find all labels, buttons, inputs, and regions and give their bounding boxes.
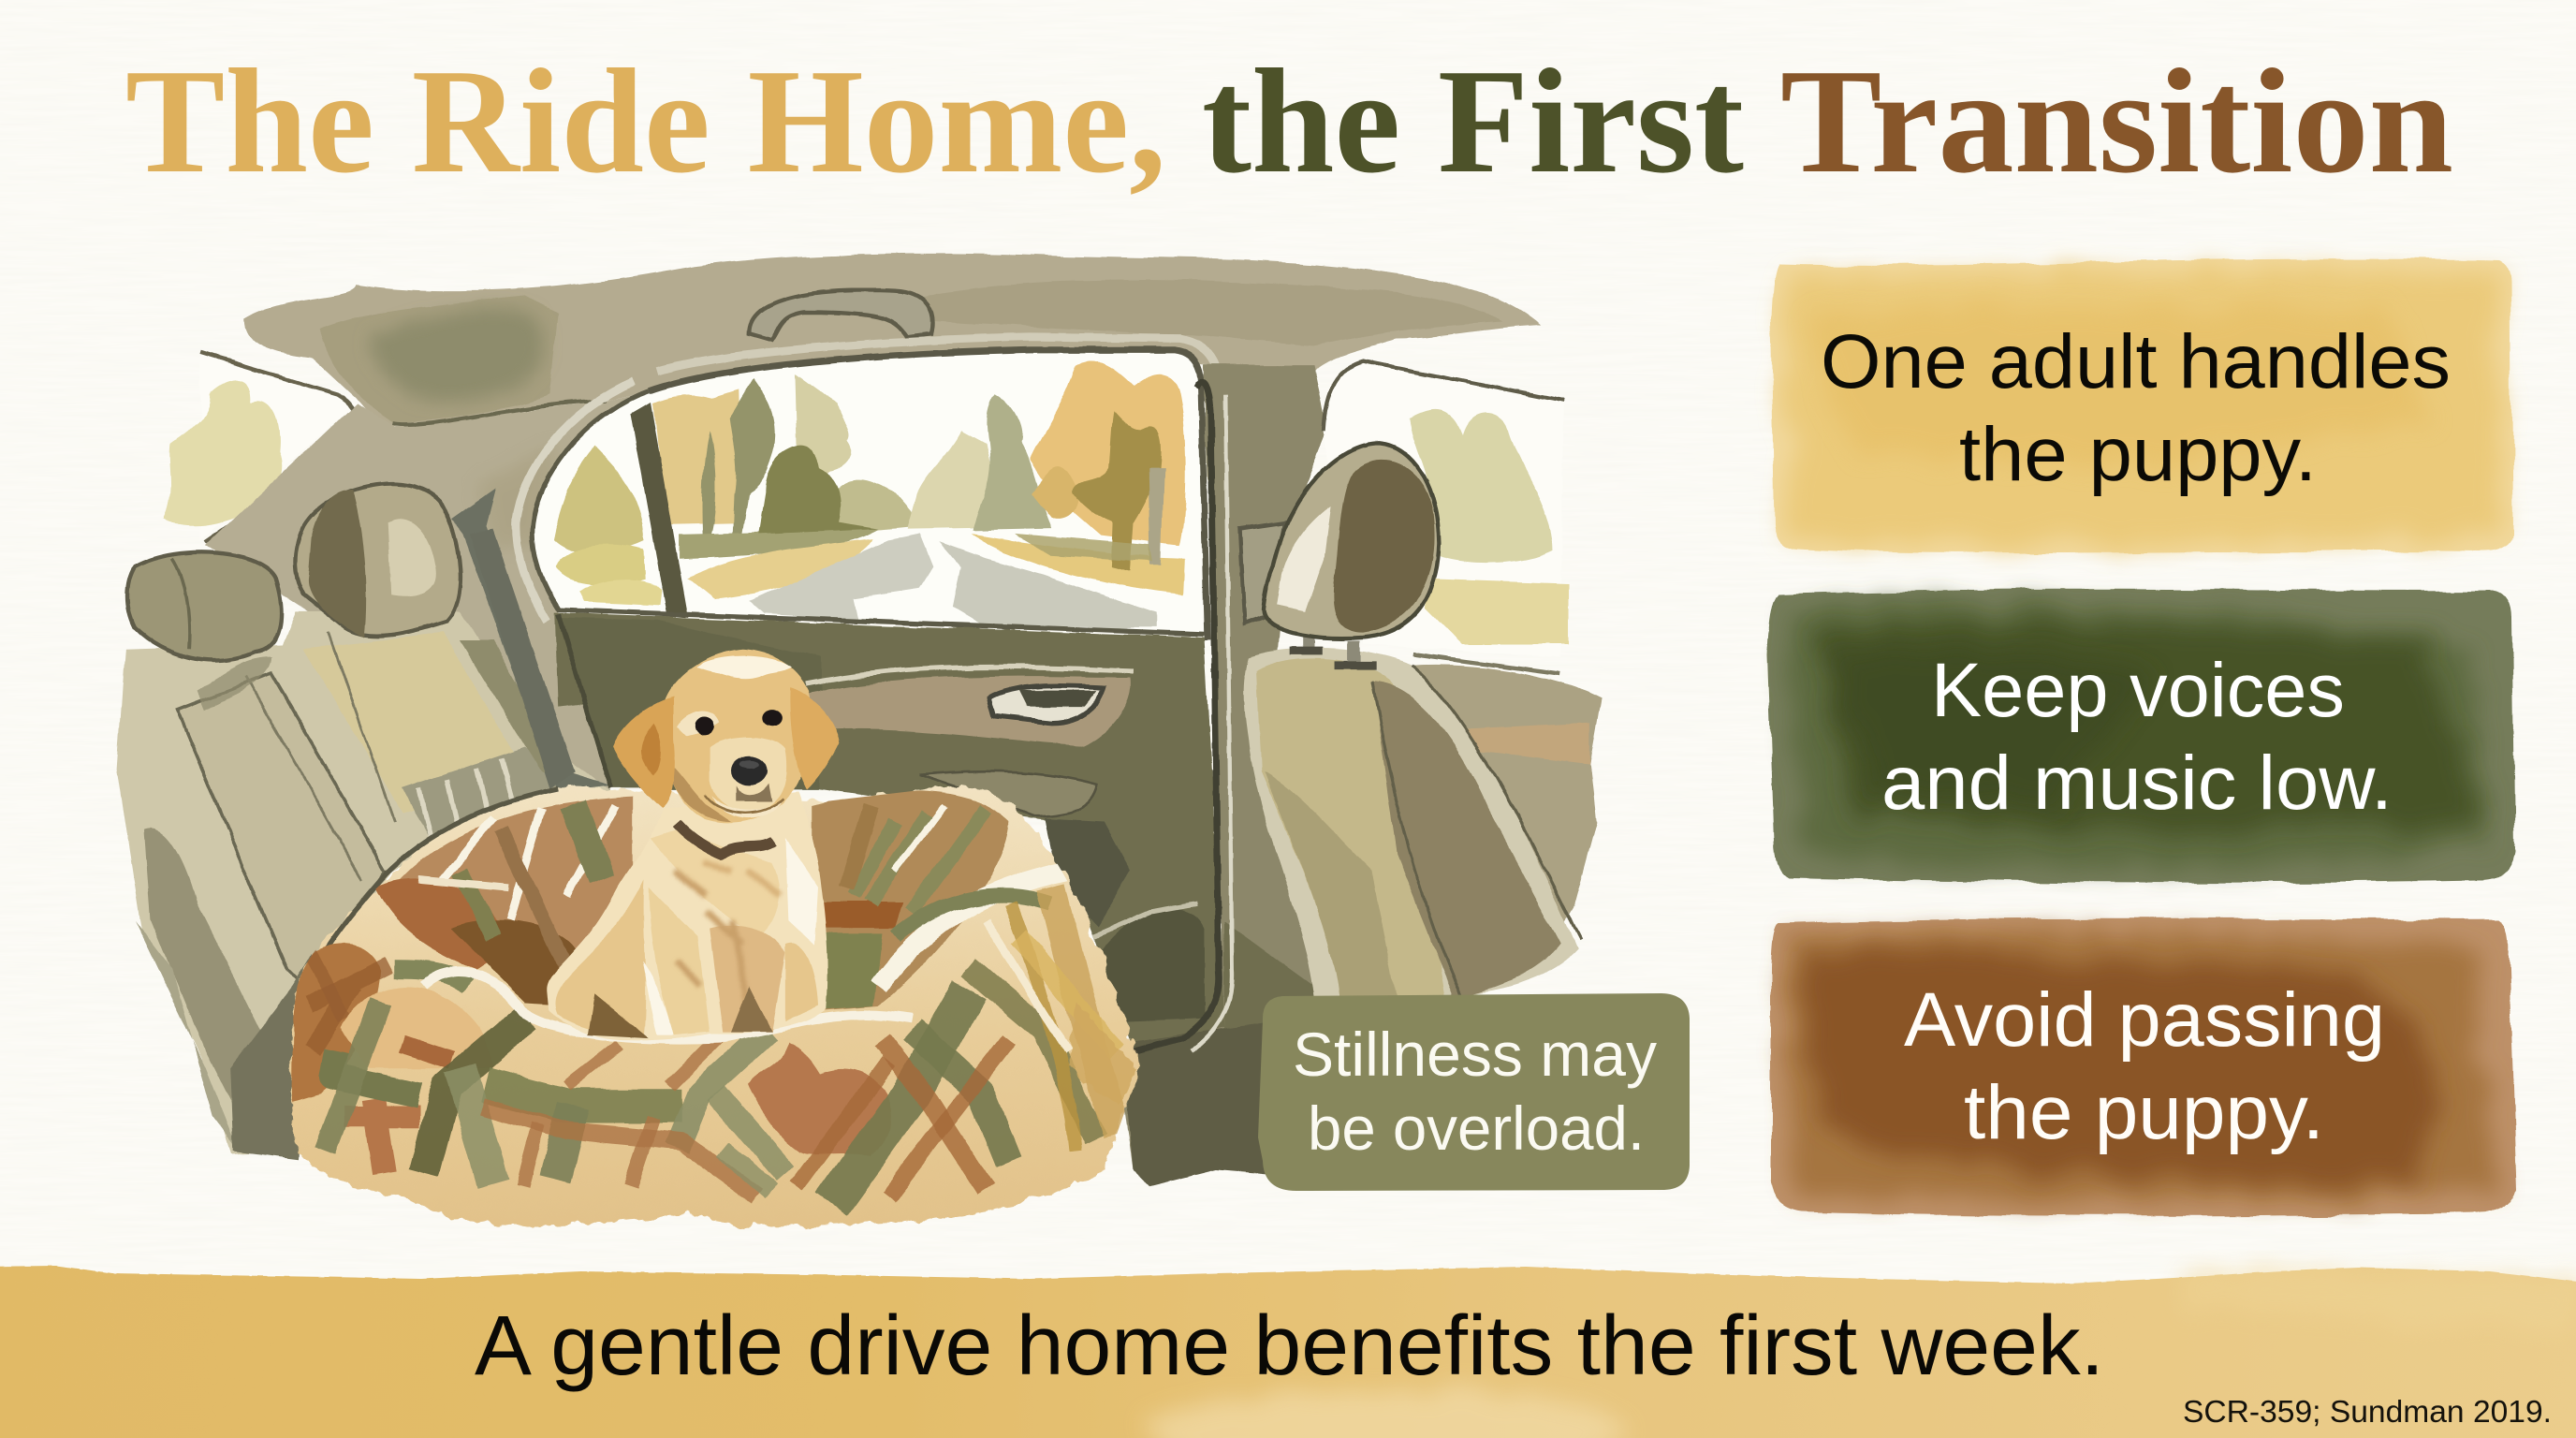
title <box>125 37 2453 204</box>
right window, trees and door <box>1325 361 1602 969</box>
left headrest <box>127 552 282 661</box>
grab handle <box>749 290 932 340</box>
puppy <box>547 649 840 1040</box>
front olive bands <box>424 1017 527 1173</box>
B pillar <box>1117 365 1364 1186</box>
bed inner back right <box>813 791 1010 1010</box>
card: keep voices and music low <box>1767 589 2515 883</box>
headliner <box>243 254 1541 427</box>
front diagonals <box>831 990 969 1204</box>
puppy eyes and nose <box>695 717 714 735</box>
right side stripes <box>969 968 1096 1138</box>
front headrest <box>1264 444 1439 666</box>
title: the First <box>1202 37 1744 204</box>
left side patches <box>292 944 381 1101</box>
card: avoid passing the puppy: the puppy. <box>1964 1070 2324 1155</box>
plaid pattern strokes <box>292 791 1117 1204</box>
C pillar <box>205 391 649 805</box>
left rear window and tree <box>165 353 357 542</box>
card: keep voices and music low: and music low. <box>1881 741 2393 826</box>
card: one adult handles the puppy <box>1771 259 2512 553</box>
title: The Ride Home, <box>125 37 1166 204</box>
title: Transition <box>1780 37 2453 204</box>
footer band <box>0 1266 2576 1438</box>
callout: stillness may be overload: Stillness may <box>1293 1020 1657 1089</box>
card: one adult handles the puppy: the puppy. <box>1959 412 2317 497</box>
puppy head <box>660 649 812 823</box>
main window with scenery <box>533 350 1204 634</box>
card: one adult handles the puppy: One adult handles <box>1821 319 2451 404</box>
puppy collar <box>677 823 774 855</box>
door panel <box>555 613 1236 1060</box>
citation: SCR-359; Sundman 2019. <box>2183 1394 2552 1429</box>
callout: stillness may be overload <box>1258 993 1690 1191</box>
puppy ears <box>613 697 675 808</box>
bed inner back left <box>400 796 633 948</box>
footer band: A gentle drive home benefits the first week. <box>475 1299 2104 1393</box>
card: avoid passing the puppy <box>1771 919 2516 1216</box>
puppy body <box>547 792 827 1040</box>
illustration: puppy in car back seat <box>117 254 1602 1225</box>
callout: stillness may be overload: be overload. <box>1308 1093 1645 1163</box>
seat belt <box>452 488 611 792</box>
middle headrest <box>295 484 461 638</box>
front seat <box>1244 648 1580 997</box>
door edge lines <box>1134 382 1232 1051</box>
front brown leaf <box>748 1042 892 1155</box>
blanket <box>291 785 1138 1225</box>
card: avoid passing the puppy: Avoid passing <box>1904 977 2385 1063</box>
bed front cream lip <box>424 972 912 1039</box>
window divider and frame <box>516 337 1219 640</box>
rear bench seat <box>117 611 611 1158</box>
card: keep voices and music low: Keep voices <box>1931 648 2345 733</box>
